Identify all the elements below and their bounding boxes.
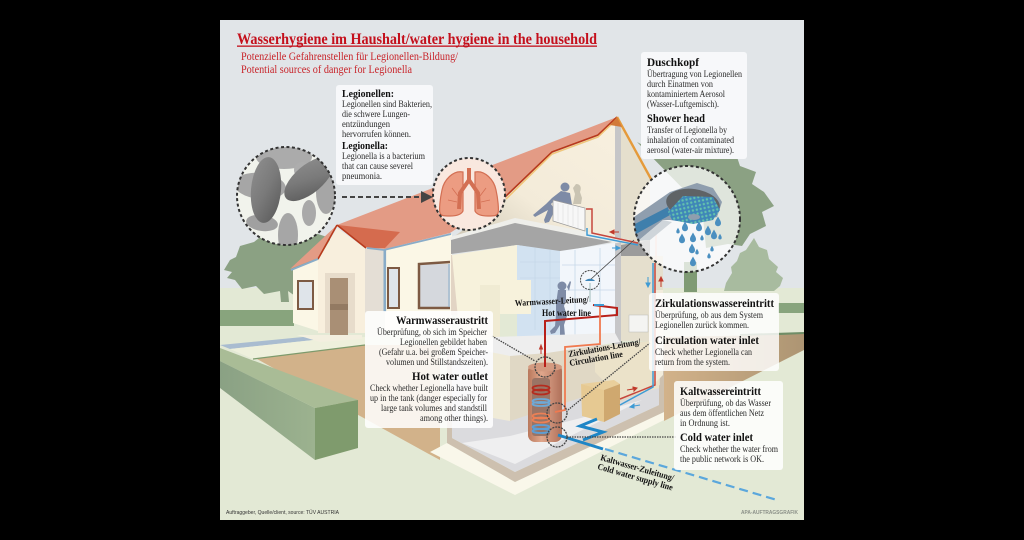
callout: shower head: durch Einatmen von xyxy=(647,80,713,90)
callout: cold water inlet: aus dem öffentlichen Netz xyxy=(680,408,764,419)
brown soil cutaway xyxy=(257,334,804,460)
arrow from bacteria to lungs xyxy=(342,191,433,203)
callout: circulation water inlet: Legionellen zurück kommen. xyxy=(655,321,749,331)
front hedge xyxy=(220,348,358,460)
callout: hot water outlet: among other things). xyxy=(420,413,488,424)
callout: hot water outlet: Hot water outlet xyxy=(412,369,488,383)
callout: shower head: kontaminiertem Aerosol xyxy=(647,90,725,100)
house front walls xyxy=(291,225,452,337)
cutaway upper gable room xyxy=(452,117,651,344)
callout: shower head: Übertragung von Legionellen xyxy=(647,68,742,80)
title: Wasserhygiene im Haushalt/water hygiene in the household xyxy=(237,31,597,48)
label: circulation line xyxy=(568,336,642,368)
callout: hot water outlet: up in the tank (danger especially for xyxy=(370,393,488,404)
callout: Legionella: that can cause severel xyxy=(342,162,413,172)
callout: cold water inlet: Überprüfung, ob das Wasser xyxy=(680,397,772,409)
cold water supply pipe xyxy=(558,419,777,500)
callout: shower head: Shower head xyxy=(647,111,705,125)
callout: cold water inlet: the public network is OK. xyxy=(680,455,764,465)
callout: circulation water inlet: Zirkulationswassereintritt xyxy=(655,296,774,310)
callout: Legionella: Legionellen: xyxy=(342,89,394,100)
callout: hot water outlet: Überprüfung, ob sich im Speicher xyxy=(377,326,488,338)
callout: hot water outlet: volumen und Stillstandszeiten). xyxy=(386,357,488,368)
detail callout leader lines and circles xyxy=(492,240,676,447)
callout: cold water inlet: Kaltwassereintritt xyxy=(680,384,761,398)
person in shower silhouette xyxy=(550,281,571,337)
callout: hot water outlet: large tank volumes and standstill xyxy=(381,404,487,414)
windows and door xyxy=(298,255,461,335)
callout: Legionella: Legionella: xyxy=(342,141,388,152)
bacteria magnifier xyxy=(236,146,336,246)
shower room xyxy=(452,243,663,341)
hedges behind the house xyxy=(220,303,804,337)
agency credit: APA-AUFTRAGSGRAFIK xyxy=(741,510,798,516)
callout: cold water inlet: in Ordnung ist. xyxy=(680,419,730,429)
label: circulation line: Circulation line xyxy=(569,349,624,368)
callout: shower head: aerosol (water-air mixture). xyxy=(647,145,734,156)
label: cold water supply line: Kaltwasser-Zuleitung/ xyxy=(599,452,676,483)
callout: shower head xyxy=(641,52,747,159)
label: hot water line: Warmwasser-Leitung/ xyxy=(515,294,589,308)
callout: cold water inlet: Check whether the water from xyxy=(680,444,779,455)
callout: Legionella: pneumonia. xyxy=(342,172,382,182)
callout: Legionella: die schwere Lungen- xyxy=(342,110,410,120)
label: circulation line: Zirkulations-Leitung/ xyxy=(568,336,642,359)
callout: shower head: (Wasser-Luftgemisch). xyxy=(647,99,719,110)
garden path xyxy=(220,335,365,359)
source credit: Auftraggeber, Quelle/client, source: TÜV AUSTRIA xyxy=(226,509,339,516)
shower head magnifier xyxy=(634,166,740,272)
callout: shower head: Transfer of Legionella by xyxy=(647,125,727,136)
storage box xyxy=(581,380,620,422)
flow arrows xyxy=(540,230,663,408)
basement walls and floor xyxy=(430,290,664,495)
callout: cold water inlet: Cold water inlet xyxy=(680,430,753,444)
subtitle xyxy=(241,49,459,76)
background panel xyxy=(220,20,804,520)
callout: circulation water inlet: Check whether Legionella can xyxy=(655,348,752,358)
callout: shower head: Duschkopf xyxy=(647,55,700,69)
callout: hot water outlet xyxy=(365,311,493,428)
callout: circulation water inlet: return from the system. xyxy=(655,357,730,368)
callout: hot water outlet: Legionellen gebildet haben xyxy=(400,338,487,348)
callout: hot water outlet: (Gefahr u.a. bei großem Speicher- xyxy=(379,347,488,358)
callout: Legionella: Legionella is a bacterium xyxy=(342,152,426,162)
background trees xyxy=(224,142,783,302)
callout: Legionella: Legionellen sind Bakterien, xyxy=(342,100,432,110)
callout: circulation water inlet xyxy=(649,293,779,371)
callout: Legionella: entzündungen xyxy=(342,120,390,130)
house roof xyxy=(290,117,617,269)
callout: Legionella xyxy=(336,85,433,185)
callout: circulation water inlet: Circulation water inlet xyxy=(655,333,759,347)
callout: Legionella: hervorrufen können. xyxy=(342,129,411,140)
subtitle: Potenzielle Gefahrenstellen für Legionellen-Bildung/ xyxy=(241,49,459,63)
hot water tank xyxy=(528,362,562,442)
label: hot water line: Hot water line xyxy=(542,308,591,318)
subtitle: Potential sources of danger for Legionella xyxy=(241,62,413,76)
callout: circulation water inlet: Überprüfung, ob aus dem System xyxy=(655,309,764,321)
shower fixture in shower room xyxy=(585,279,604,305)
callout: hot water outlet: Warmwasseraustritt xyxy=(396,313,488,327)
pipes xyxy=(545,209,656,412)
label: cold water supply line: Cold water supply line xyxy=(596,461,674,492)
callout: shower head: inhalation of contaminated xyxy=(647,135,734,146)
upper floor slab xyxy=(450,218,650,258)
lung magnifier xyxy=(433,158,505,230)
radiators xyxy=(553,200,648,332)
callout: hot water outlet: Check whether Legionella have built xyxy=(370,384,488,394)
callout: cold water inlet xyxy=(674,381,783,470)
label: hot water line xyxy=(515,294,591,318)
person on balcony silhouette xyxy=(533,182,582,223)
